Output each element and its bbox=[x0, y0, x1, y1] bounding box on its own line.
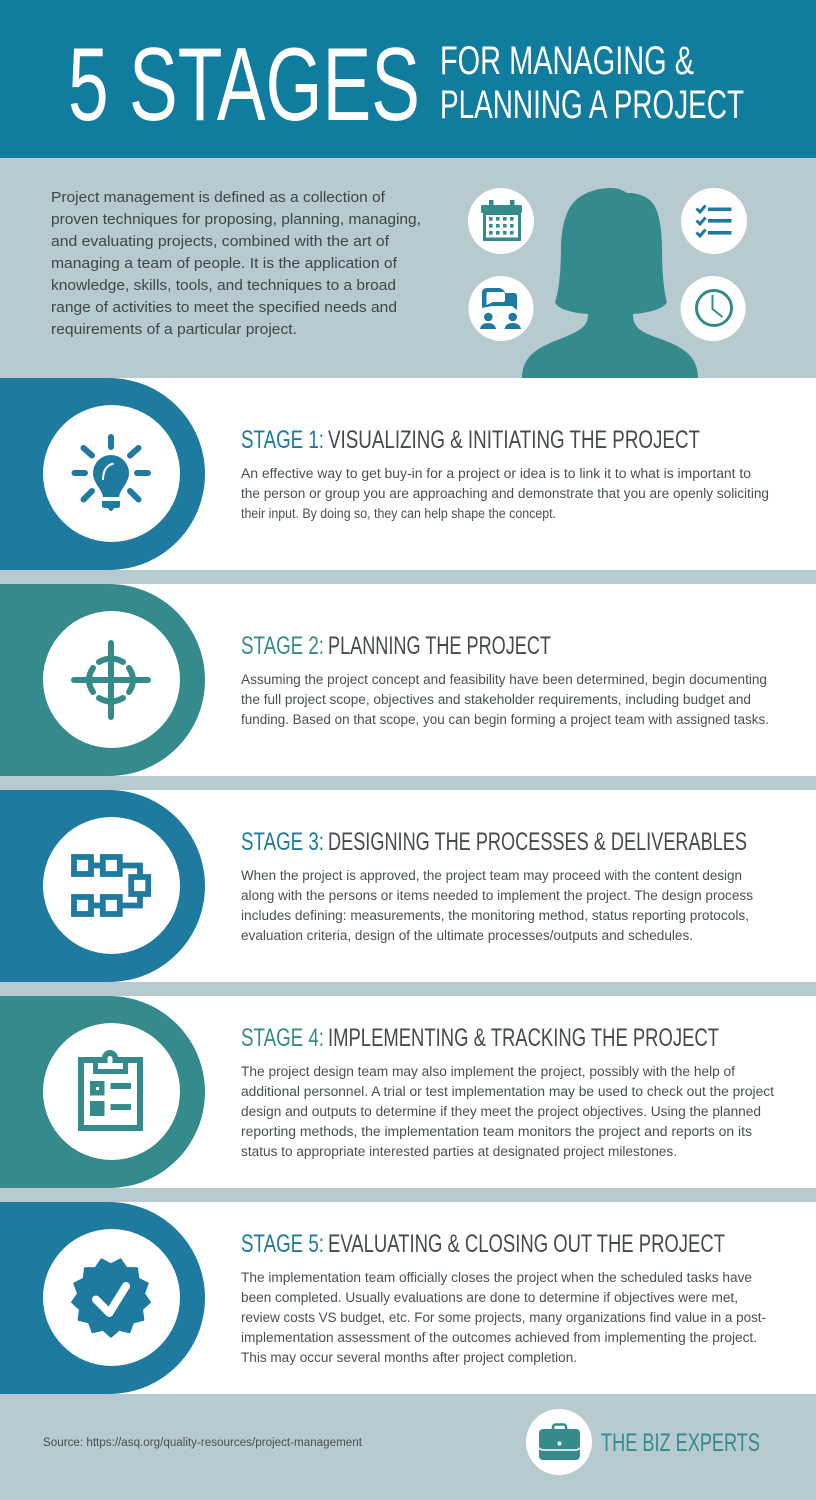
stage 2 heading bbox=[241, 632, 551, 660]
header banner bbox=[0, 0, 816, 158]
stage 3 tab bbox=[0, 790, 205, 982]
intro paragraph: knowledge, skills, tools, and techniques to a broad bbox=[51, 278, 396, 294]
intro paragraph: proven techniques for proposing, planning, managing, bbox=[51, 212, 421, 228]
icon: crosshair bbox=[74, 643, 148, 717]
brand name: THE BIZ EXPERTS bbox=[601, 1429, 760, 1457]
stage 3 text: evaluation criteria, design of the ultimate processes/outputs and schedules. bbox=[241, 928, 693, 943]
intro paragraph: range of activities to meet the specified needs and bbox=[51, 300, 397, 316]
icon: process flow bbox=[74, 857, 148, 914]
icon: checklist bbox=[681, 188, 747, 254]
stage 4 text bbox=[241, 1064, 774, 1159]
stage 4 text: additional personnel. A trial or test implementation may be used to check out the project bbox=[241, 1084, 774, 1099]
stage 1 heading bbox=[241, 426, 700, 454]
stage 5 text: implementation assessment of the outcomes achieved from implementing the project. bbox=[241, 1330, 757, 1345]
stage 3 heading: STAGE 3: bbox=[241, 828, 324, 856]
icon: discussion bbox=[468, 276, 534, 341]
intro paragraph: and evaluating projects, combined with the art of bbox=[51, 234, 390, 250]
icon: briefcase bbox=[526, 1409, 592, 1475]
stage 5 text: The implementation team officially closes the project when the scheduled tasks have bbox=[241, 1270, 752, 1285]
icon: clock bbox=[680, 276, 746, 341]
panel: stage 4 bbox=[0, 996, 816, 1188]
stage 1 heading: STAGE 1: bbox=[241, 426, 324, 454]
stage 3 text: includes defining: measurements, the monitoring method, status reporting protocols, bbox=[241, 908, 749, 923]
stage 4 heading bbox=[241, 1024, 719, 1052]
stage 1 tab bbox=[0, 378, 205, 570]
intro paragraph: requirements of a particular project. bbox=[51, 322, 297, 338]
icon: calendar bbox=[468, 188, 534, 254]
stage 3 text: along with the persons or items needed to implement the project. The design process bbox=[241, 888, 753, 903]
stage 4 text: status to appropriate interested parties at designated project milestones. bbox=[241, 1144, 677, 1159]
stage 3 text: When the project is approved, the project team may proceed with the content design bbox=[241, 868, 742, 883]
stage 4 tab bbox=[0, 996, 205, 1188]
icon: check badge bbox=[72, 1259, 150, 1337]
stage 5 text: been completed. Usually evaluations are done to determine if objectives were met, bbox=[241, 1290, 738, 1305]
icon: woman silhouette bbox=[522, 188, 698, 378]
stage 1 text: An effective way to get buy-in for a project or idea is to link it to what is important to bbox=[241, 466, 751, 481]
stage 2 text: the full project scope, objectives and stakeholder requirements, including budget and bbox=[241, 692, 751, 707]
icon: light bulb bbox=[74, 437, 148, 511]
intro paragraph: managing a team of people. It is the application of bbox=[51, 256, 398, 272]
intro paragraph: Project management is defined as a collection of bbox=[51, 190, 386, 206]
stage 5 text: review costs VS budget, etc. For some projects, many organizations find value in a post- bbox=[241, 1310, 766, 1325]
stage 1 text: their input. By doing so, they can help shape the concept. bbox=[241, 506, 556, 521]
stage 1 text: the person or group you are approaching and demonstrate that you are openly soliciting bbox=[241, 486, 769, 501]
stage 2 tab bbox=[0, 584, 205, 776]
stage 1 text bbox=[241, 466, 769, 521]
stage 5 tab bbox=[0, 1202, 205, 1394]
source note: Source: https://asq.org/quality-resources/project-management bbox=[43, 1437, 363, 1449]
stage 2 text bbox=[241, 672, 769, 727]
stage 4 text: design and outputs to determine if they meet the project objectives. Using the planned bbox=[241, 1104, 761, 1119]
stage 5 text bbox=[241, 1270, 766, 1365]
icon: clipboard bbox=[78, 1050, 143, 1131]
stage 2 heading: STAGE 2: bbox=[241, 632, 324, 660]
stage 2 text: funding. Based on that scope, you can begin forming a project team with assigned tasks. bbox=[241, 712, 769, 727]
stage 4 text: The project design team may also implement the project, possibly with the help of bbox=[241, 1064, 735, 1079]
panel: stage 1 bbox=[0, 378, 816, 570]
stage 4 text: reporting methods, the implementation team monitors the project and reports on its bbox=[241, 1124, 752, 1139]
panel: stage 2 bbox=[0, 584, 816, 776]
stage 5 heading bbox=[241, 1230, 725, 1258]
intro paragraph bbox=[51, 190, 421, 338]
title: 5 stages: 5 STAGES bbox=[68, 27, 420, 143]
stage 5 text: This may occur several months after project completion. bbox=[241, 1350, 577, 1365]
stage 2 heading: PLANNING THE PROJECT bbox=[328, 632, 551, 660]
stage 1 heading: VISUALIZING & INITIATING THE PROJECT bbox=[328, 426, 700, 454]
stage 3 text bbox=[241, 868, 753, 943]
stage 2 text: Assuming the project concept and feasibility have been determined, begin documenting bbox=[241, 672, 767, 687]
stage 5 heading: STAGE 5: bbox=[241, 1230, 324, 1258]
stage 4 heading: STAGE 4: bbox=[241, 1024, 324, 1052]
panel: stage 3 bbox=[0, 790, 816, 982]
subtitle line 1: FOR MANAGING & bbox=[440, 39, 694, 83]
panel: stage 5 bbox=[0, 1202, 816, 1394]
